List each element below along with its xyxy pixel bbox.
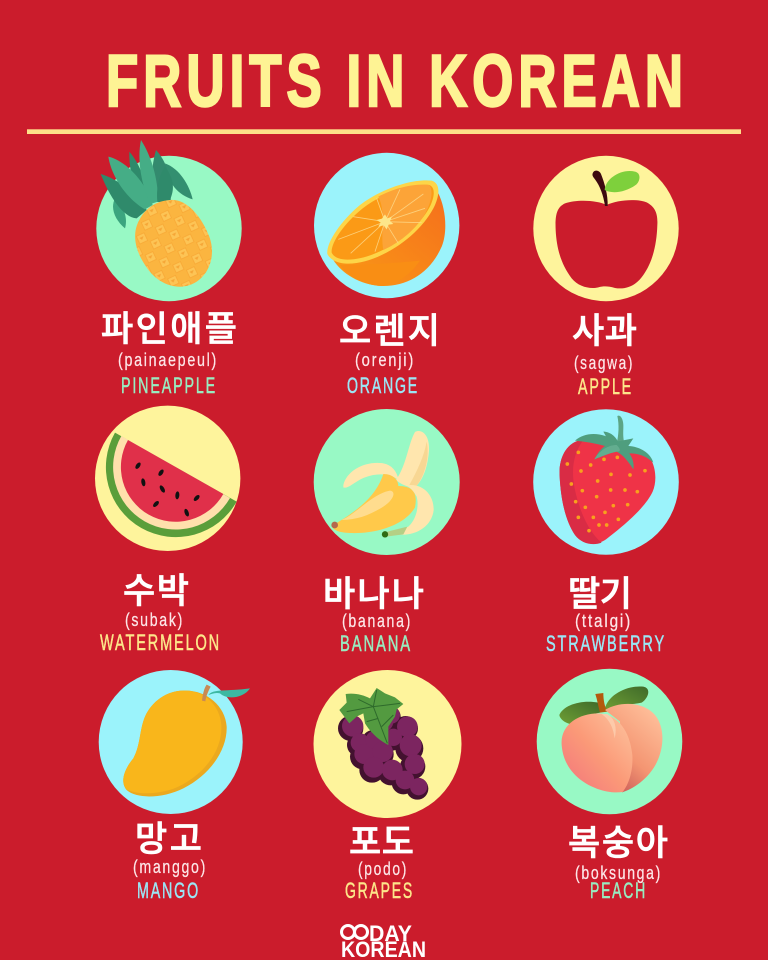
romanization: (manggo) — [133, 856, 207, 877]
icon: pineapple — [101, 140, 212, 287]
circle background — [314, 153, 459, 298]
icon: strawberry — [559, 416, 655, 544]
english word: ORANGE — [347, 373, 419, 398]
circle background — [99, 670, 243, 814]
english word: MANGO — [137, 878, 200, 903]
korean word: 바나나 — [323, 575, 424, 614]
circle background — [96, 156, 242, 301]
panel: peach — [537, 669, 682, 903]
romanization: (podo) — [358, 858, 408, 879]
english word: WATERMELON — [100, 630, 221, 655]
english word: GRAPES — [345, 878, 414, 903]
panel: mango — [99, 670, 250, 903]
icon: mango — [123, 685, 250, 796]
english word: APPLE — [578, 374, 633, 399]
korean word: 복숭아 — [568, 824, 668, 863]
icon: orange — [327, 180, 445, 286]
circle background — [95, 406, 240, 551]
circle background — [533, 409, 679, 555]
korean word: 포도 — [349, 823, 414, 862]
panel: watermelon — [95, 406, 240, 655]
panel: pineapple — [96, 140, 242, 398]
romanization: (ttalgi) — [575, 610, 632, 631]
korean word: 수박 — [123, 572, 189, 611]
panel: orange — [314, 153, 459, 398]
romanization: (painaepeul) — [118, 349, 218, 370]
romanization: (orenji) — [355, 349, 415, 370]
korean word: 파인애플 — [101, 310, 237, 349]
icon: grapes — [338, 688, 428, 800]
english word: STRAWBERRY — [546, 631, 666, 656]
english word: PEACH — [590, 878, 647, 903]
icon: watermelon — [106, 433, 237, 537]
english word: BANANA — [340, 631, 412, 656]
romanization: (subak) — [125, 609, 184, 630]
romanization: (boksunga) — [575, 862, 662, 883]
circle background — [537, 669, 682, 814]
english word: PINEAPPLE — [121, 373, 217, 398]
circle background — [533, 156, 679, 301]
korean word: 사과 — [572, 312, 637, 351]
romanization: (banana) — [342, 610, 412, 631]
panel: strawberry — [533, 409, 679, 656]
korean word: 오렌지 — [339, 312, 440, 351]
icon: banana — [331, 431, 434, 537]
panel: banana — [314, 409, 460, 656]
panel: grapes — [314, 670, 462, 903]
circle background — [314, 409, 460, 555]
korean word: 딸기 — [568, 575, 632, 614]
icon: apple — [556, 171, 657, 288]
panel: apple — [533, 156, 679, 399]
logo: 90 Day Korean: DAY — [369, 921, 412, 946]
circle background — [314, 670, 462, 818]
korean word: 망고 — [135, 820, 202, 859]
romanization: (sagwa) — [574, 352, 634, 373]
icon: peach — [559, 686, 662, 792]
logo: 90 Day Korean — [341, 921, 426, 960]
